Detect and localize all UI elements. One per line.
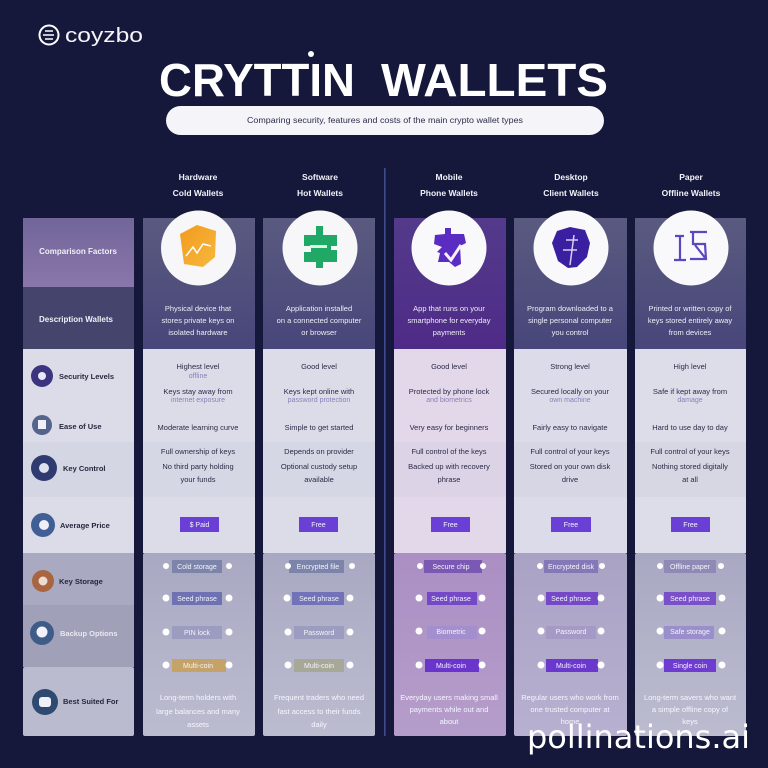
panel: desktop wallets bbox=[514, 210, 627, 736]
panel: hardware wallets: assets bbox=[187, 720, 209, 729]
feature pills: Multi-coin bbox=[183, 663, 213, 670]
panel: row labels bbox=[23, 218, 134, 736]
panel: paper wallets: from devices bbox=[669, 328, 712, 337]
panel: desktop wallets: Strong level bbox=[550, 362, 590, 371]
panel: row labels: Best Suited For bbox=[63, 697, 119, 706]
panel: paper wallets: Printed or written copy of bbox=[649, 304, 732, 313]
panel: mobile wallets: payments while out and bbox=[410, 705, 488, 714]
panel: row labels: Description Wallets bbox=[39, 315, 114, 324]
panel: hardware wallets bbox=[143, 210, 255, 736]
title bbox=[159, 51, 608, 106]
feature pills bbox=[162, 560, 232, 672]
feature pills: Seed phrase bbox=[299, 596, 339, 603]
column headers: Paper bbox=[679, 172, 704, 182]
panel: software wallets: fast access to their funds bbox=[278, 707, 361, 716]
panel: hardware wallets: offline bbox=[189, 373, 207, 380]
panel: software wallets: Good level bbox=[301, 362, 337, 371]
button bbox=[431, 517, 470, 532]
icon: dark gem bbox=[534, 210, 608, 286]
panel: desktop wallets: single personal computer bbox=[528, 316, 612, 325]
column headers: Software bbox=[302, 172, 338, 182]
feature pills: Secure chip bbox=[433, 564, 470, 571]
feature pills: Multi-coin bbox=[556, 663, 586, 670]
feature pills bbox=[656, 560, 726, 672]
button bbox=[299, 517, 338, 532]
feature pills: Encrypted file bbox=[297, 564, 339, 571]
icon: orange cube bbox=[161, 210, 236, 286]
panel: desktop wallets: you control bbox=[552, 328, 589, 337]
panel: desktop wallets: home bbox=[561, 717, 579, 726]
panel: row labels: Backup Options bbox=[60, 629, 118, 638]
panel: hardware wallets: large balances and many bbox=[156, 707, 240, 716]
panel: software wallets: or browser bbox=[301, 328, 337, 337]
panel: paper wallets: Safe if kept away from bbox=[653, 387, 727, 396]
feature pills: Encrypted disk bbox=[548, 564, 594, 571]
logo: coyzbo bbox=[65, 25, 143, 47]
button bbox=[671, 517, 710, 532]
feature pills: Seed phrase bbox=[670, 596, 710, 603]
panel: row labels: Average Price bbox=[60, 521, 110, 530]
column headers bbox=[173, 172, 721, 198]
panel: software wallets: password protection bbox=[288, 397, 350, 404]
feature pills bbox=[416, 560, 486, 672]
feature pills: PIN lock bbox=[184, 630, 211, 637]
panel: hardware wallets: Keys stay away from bbox=[163, 387, 233, 396]
subtitle pill bbox=[166, 106, 604, 135]
panel: paper wallets bbox=[635, 210, 746, 736]
feature pills: Password bbox=[304, 630, 334, 637]
panel: desktop wallets: Regular users who work from bbox=[521, 693, 619, 702]
icon: storage bbox=[32, 570, 54, 592]
panel: desktop wallets: Program downloaded to a bbox=[527, 304, 614, 313]
panel: software wallets: available bbox=[304, 475, 334, 484]
title: CRYTTIN bbox=[159, 54, 355, 106]
panel: row labels: Comparison Factors bbox=[39, 247, 117, 256]
icon: green cross bbox=[282, 210, 358, 286]
feature pills: Cold storage bbox=[177, 564, 217, 571]
panel: hardware wallets: stores private keys on bbox=[162, 316, 234, 325]
divider bbox=[384, 168, 386, 736]
panel: paper wallets: a simple offline copy of bbox=[652, 705, 729, 714]
panel: mobile wallets: Good level bbox=[431, 362, 467, 371]
title: WALLETS bbox=[381, 54, 608, 106]
panel: paper wallets: keys bbox=[682, 717, 698, 726]
panel: mobile wallets: payments bbox=[433, 328, 466, 337]
panel: software wallets: Application installed bbox=[286, 304, 352, 313]
feature pills: Seed phrase bbox=[551, 596, 591, 603]
panel: mobile wallets: Very easy for beginners bbox=[410, 423, 489, 432]
panel: mobile wallets bbox=[394, 210, 506, 736]
panel: desktop wallets: Full control of your keys bbox=[530, 447, 610, 456]
icon: purple shield bbox=[412, 210, 486, 286]
panel: paper wallets: keys stored entirely away bbox=[648, 316, 732, 325]
feature pills bbox=[537, 560, 605, 672]
icon: control bbox=[31, 455, 57, 481]
panel: hardware wallets: No third party holding bbox=[162, 462, 234, 471]
panel: paper wallets: Long-term savers who want bbox=[644, 693, 737, 702]
column headers: Mobile bbox=[436, 172, 463, 182]
panel: mobile wallets: phrase bbox=[438, 475, 460, 484]
panel: software wallets: Optional custody setup bbox=[281, 462, 357, 471]
panel: software wallets: Depends on provider bbox=[284, 447, 354, 456]
panel: software wallets: on a connected computer bbox=[277, 316, 362, 325]
feature pills: Offline paper bbox=[670, 564, 711, 571]
panel: desktop wallets: Stored on your own disk bbox=[530, 462, 610, 471]
column headers: Offline Wallets bbox=[662, 188, 721, 198]
panel: hardware wallets: Physical device that bbox=[165, 304, 232, 313]
column headers: Phone Wallets bbox=[420, 188, 478, 198]
panel: desktop wallets: Fairly easy to navigate bbox=[532, 423, 608, 432]
panel: mobile wallets: Backed up with recovery bbox=[408, 462, 490, 471]
panel: software wallets: Simple to get started bbox=[285, 423, 353, 432]
column headers: Hardware bbox=[179, 172, 218, 182]
panel: mobile wallets: Protected by phone lock bbox=[409, 387, 489, 396]
icon: backup bbox=[30, 621, 54, 645]
feature pills: Multi-coin bbox=[304, 663, 334, 670]
icon: price bbox=[31, 513, 55, 537]
panel: desktop wallets: drive bbox=[562, 475, 578, 484]
button: Free bbox=[683, 522, 698, 529]
panel: mobile wallets: smartphone for everyday bbox=[408, 316, 491, 325]
panel: mobile wallets: Full control of the keys bbox=[411, 447, 487, 456]
panel: desktop wallets: Secured locally on your bbox=[531, 387, 609, 396]
panel: paper wallets: Full control of your keys bbox=[650, 447, 730, 456]
panel: software wallets bbox=[263, 210, 375, 736]
button bbox=[551, 517, 591, 532]
panel: hardware wallets: your funds bbox=[180, 475, 216, 484]
panel: paper wallets: damage bbox=[677, 397, 703, 404]
panel: mobile wallets: App that runs on your bbox=[413, 304, 485, 313]
panel: desktop wallets: own machine bbox=[549, 397, 591, 404]
panel: mobile wallets: Everyday users making small bbox=[400, 693, 498, 702]
panel: software wallets: Keys kept online with bbox=[284, 387, 354, 396]
button: $ Paid bbox=[190, 522, 210, 529]
feature pills: Safe storage bbox=[670, 629, 710, 636]
panel: hardware wallets: isolated hardware bbox=[168, 328, 228, 337]
feature pills bbox=[284, 560, 355, 672]
feature pills: Password bbox=[556, 629, 586, 636]
panel: row labels: Security Levels bbox=[59, 372, 114, 381]
feature pills: Seed phrase bbox=[177, 596, 217, 603]
panel: row labels: Ease of Use bbox=[59, 422, 102, 431]
panel: hardware wallets: Long-term holders with bbox=[160, 693, 236, 702]
button bbox=[180, 517, 219, 532]
feature pills: Single coin bbox=[673, 663, 707, 670]
watermark: pollinations.ai bbox=[527, 718, 750, 756]
column headers: Cold Wallets bbox=[173, 188, 224, 198]
feature pills: Biometric bbox=[436, 629, 466, 636]
panel: mobile wallets: about bbox=[440, 717, 459, 726]
panel: hardware wallets: internet exposure bbox=[171, 397, 225, 404]
column headers: Hot Wallets bbox=[297, 188, 343, 198]
button: Free bbox=[443, 522, 458, 529]
subtitle pill: Comparing security, features and costs of the main crypto wallet types bbox=[247, 116, 523, 125]
panel: hardware wallets: Moderate learning curve bbox=[158, 423, 238, 432]
panel: mobile wallets: and biometrics bbox=[426, 397, 472, 404]
panel: hardware wallets: Highest level bbox=[177, 362, 220, 371]
icon: ease of use bbox=[32, 415, 52, 435]
panel: paper wallets: at all bbox=[682, 475, 698, 484]
panel: paper wallets: Nothing stored digitally bbox=[652, 462, 728, 471]
icon: best for bbox=[32, 689, 58, 715]
panel: paper wallets: Hard to use day to day bbox=[652, 423, 728, 432]
panel: software wallets: Frequent traders who need bbox=[274, 693, 364, 702]
button: Free bbox=[311, 522, 326, 529]
button: Free bbox=[564, 522, 578, 529]
feature pills: Multi-coin bbox=[436, 663, 466, 670]
panel: desktop wallets: one trusted computer at bbox=[530, 705, 611, 714]
column headers: Client Wallets bbox=[543, 188, 599, 198]
icon: outlined glyph bbox=[654, 210, 728, 286]
logo bbox=[40, 25, 143, 47]
panel: row labels: Key Control bbox=[63, 464, 106, 473]
panel: hardware wallets: Full ownership of keys bbox=[161, 447, 235, 456]
panel: software wallets: daily bbox=[311, 720, 327, 729]
panel: paper wallets: High level bbox=[674, 362, 707, 371]
icon: security bbox=[31, 365, 53, 387]
panel: row labels: Key Storage bbox=[59, 577, 103, 586]
column headers: Desktop bbox=[554, 172, 588, 182]
feature pills: Seed phrase bbox=[431, 596, 471, 603]
